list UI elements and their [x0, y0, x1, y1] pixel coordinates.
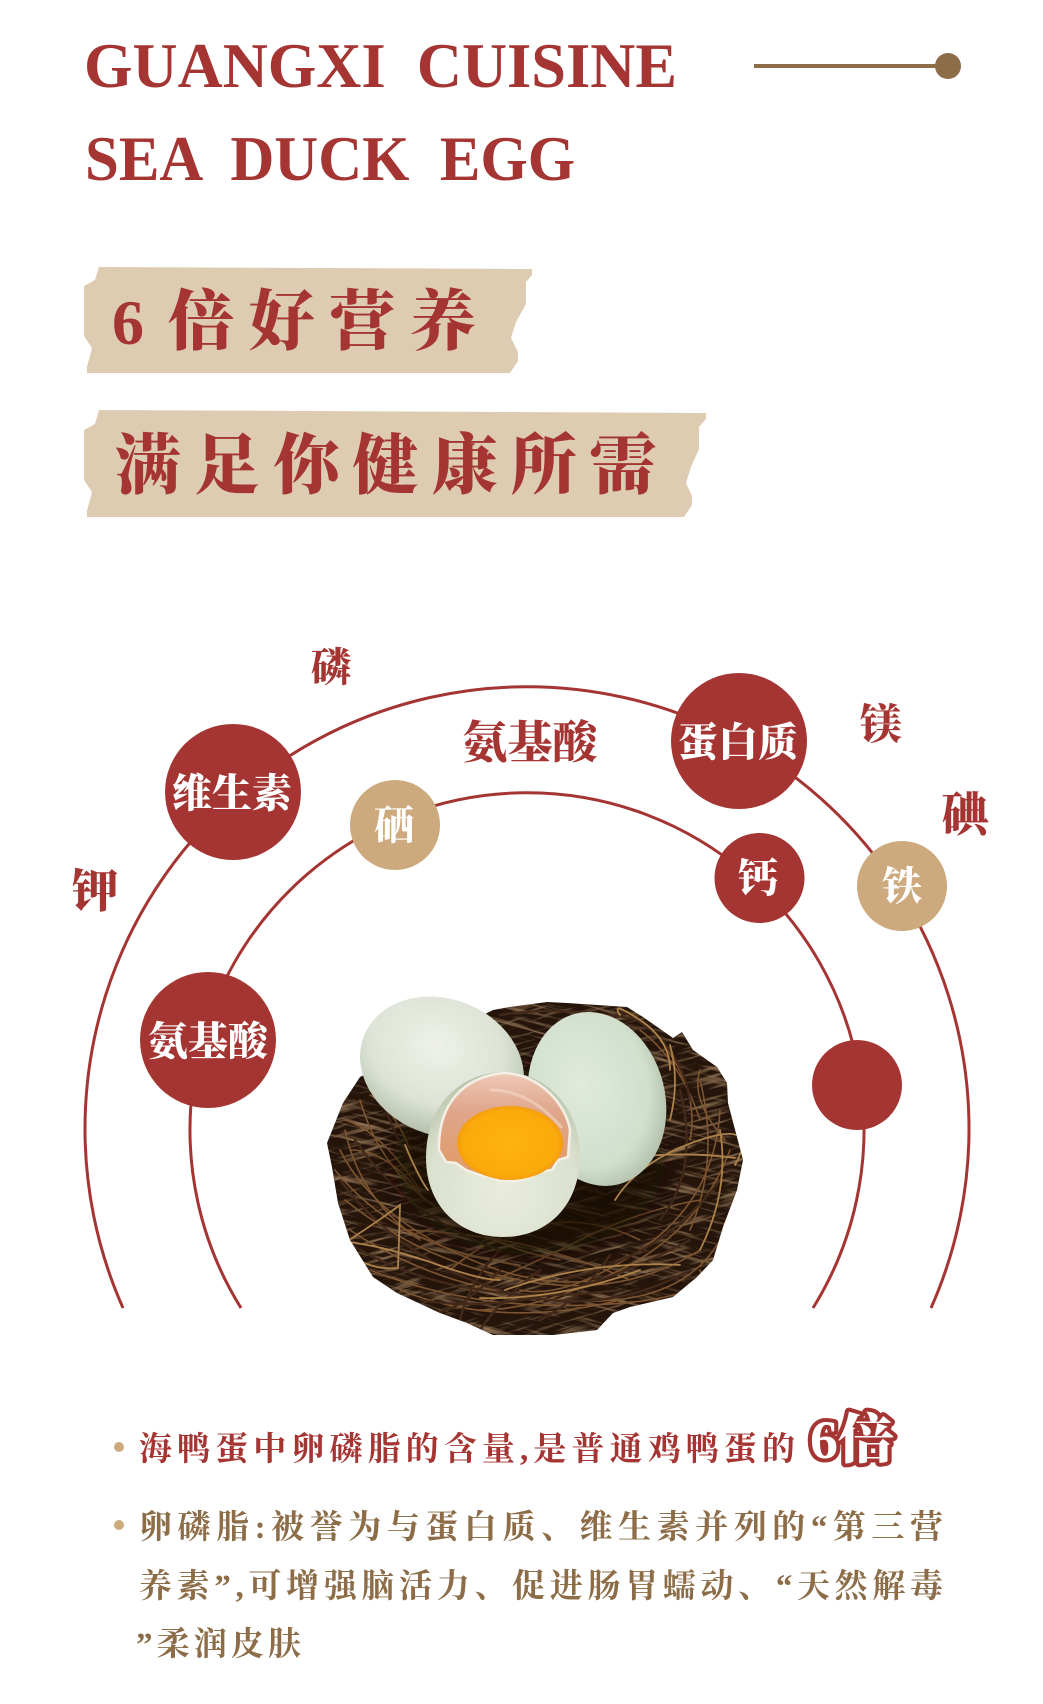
floating labels: 镁: [860, 702, 902, 749]
circle: iron: 铁: [882, 864, 922, 909]
floating labels: 氨基酸: [462, 718, 601, 768]
floating labels: 磷: [311, 645, 351, 690]
circle: protein: 蛋白质: [678, 720, 798, 765]
body text: [136, 1509, 943, 1663]
left egg: [339, 972, 545, 1162]
banner: 6 times nutrition: 倍好营养: [168, 286, 476, 359]
highlight sentence: 海鸭蛋中卵磷脂的含量,是普通鸡鸭蛋的: [139, 1431, 795, 1468]
body text: 卵磷脂:被誉为与蛋白质、维生素并列的“第三营: [139, 1509, 943, 1546]
body text: ”柔润皮肤: [136, 1626, 301, 1663]
banner: meets health needs: [84, 410, 706, 517]
shadow around eggs: [395, 1065, 665, 1255]
circle: blank: [812, 1040, 902, 1130]
banner: 6 times nutrition: [84, 267, 532, 373]
6 times badge: 6倍: [810, 1410, 894, 1470]
circle: vitamins: 维生素: [172, 771, 293, 816]
circle: iron: [857, 841, 947, 931]
bullet: red: [114, 1442, 124, 1452]
banner: meets health needs: 满足你健康所需: [115, 429, 656, 503]
egg opening: [439, 1073, 570, 1181]
illustration: eggs in nest: [327, 996, 743, 1335]
decorative pin line: [754, 53, 961, 79]
arcs: [85, 687, 969, 1308]
body text: 养素”,可增强脑活力、促进肠胃蠕动、“天然解毒: [139, 1568, 943, 1605]
title: [84, 30, 677, 194]
circle: protein: [671, 673, 807, 809]
floating labels: 钾: [72, 866, 118, 917]
nest: [327, 1002, 743, 1335]
yolk: [457, 1106, 563, 1180]
circle: selenium: [350, 780, 440, 870]
circle: vitamins: [165, 724, 301, 860]
circle: calcium: 钙: [738, 856, 778, 901]
cracked egg: [426, 1072, 580, 1237]
circle: selenium: 硒: [374, 803, 414, 848]
circle: amino acid: 氨基酸: [148, 1019, 271, 1064]
floating labels: [72, 645, 992, 917]
floating labels: 碘: [942, 790, 992, 842]
circle: amino acid: [140, 972, 276, 1108]
right egg: [510, 997, 684, 1201]
title: GUANGXI CUISINE: [84, 30, 677, 101]
circle: calcium: [714, 833, 804, 923]
banner: 6 times nutrition: 6: [112, 287, 144, 358]
title: SEA DUCK EGG: [85, 123, 575, 194]
bullet: brown: [114, 1520, 124, 1530]
